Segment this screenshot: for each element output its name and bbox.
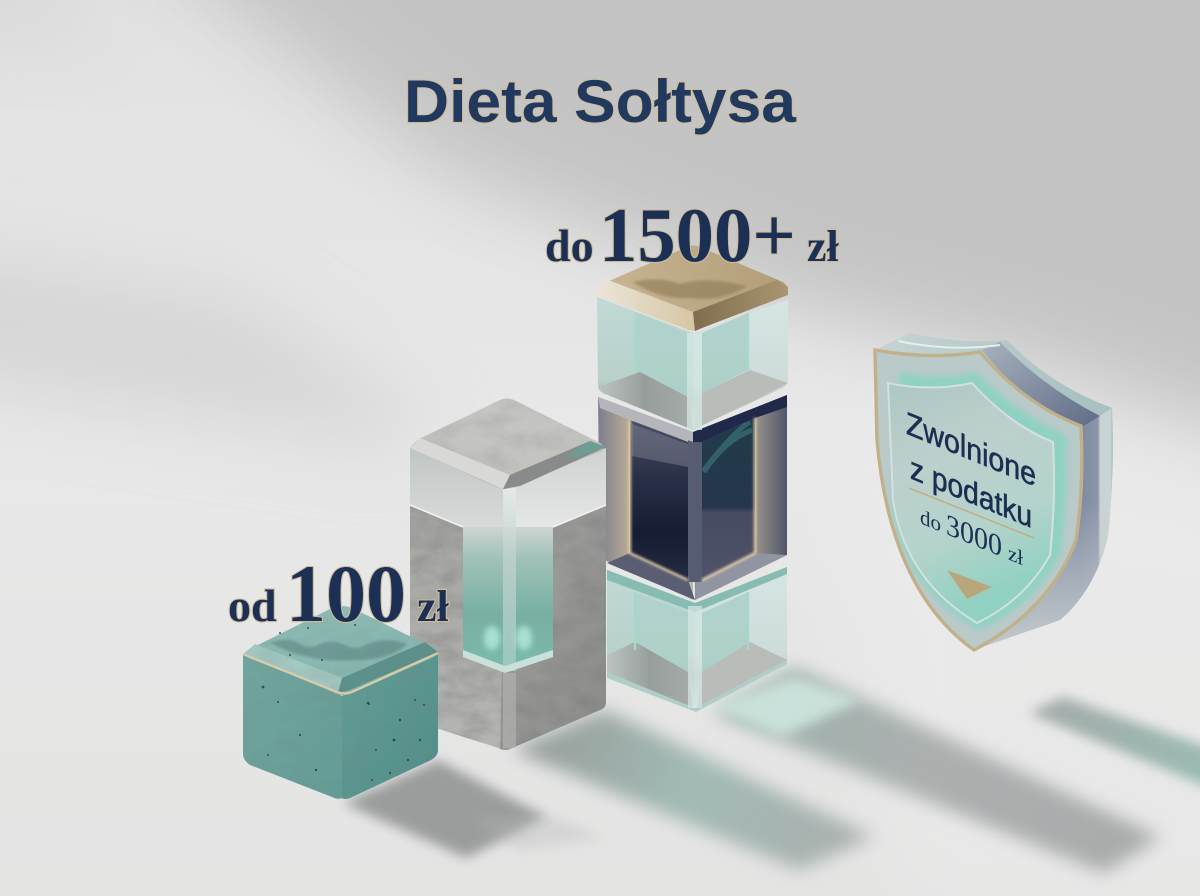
shield front face — [875, 350, 1082, 650]
lower glass block — [607, 567, 787, 712]
shield text: 3000 — [946, 507, 1002, 564]
upper glass block — [597, 297, 788, 430]
ground shadows — [343, 667, 1200, 873]
down-pointing triangle — [947, 570, 992, 599]
concrete pillar with glass window — [400, 395, 610, 755]
bottom chamfers — [607, 553, 695, 600]
speckles — [262, 624, 425, 781]
price label: do 1500+ zł — [545, 192, 840, 278]
top chamfers — [598, 397, 693, 442]
shield text: z podatku — [910, 450, 1032, 536]
shadow: concrete pillar — [512, 710, 874, 870]
shadow: teal block — [343, 760, 547, 858]
stone grain — [258, 641, 342, 696]
leaf shadow on top — [270, 640, 408, 661]
teal stone block — [240, 602, 442, 802]
block left face — [243, 654, 342, 799]
pillar right face — [500, 505, 606, 750]
warm inner glow lines — [630, 418, 755, 580]
frosted glass band — [410, 448, 606, 545]
central bevel — [688, 440, 702, 582]
caustic light from glass — [713, 677, 862, 737]
shield depth side — [973, 408, 1113, 650]
price label: do 1500+ zł: 1500+ — [599, 192, 796, 278]
shield badge — [875, 333, 1113, 650]
shield text: zł — [1008, 541, 1023, 570]
glowing glass window — [410, 488, 606, 673]
pillar top — [410, 398, 604, 489]
gold cap — [597, 246, 788, 331]
inner dark faces — [630, 420, 688, 580]
stone grain — [410, 506, 606, 748]
dark glass block — [598, 395, 787, 600]
teal glow — [892, 372, 1066, 630]
block top — [246, 606, 437, 695]
price label: do 1500+ zł: zł — [807, 222, 840, 271]
block right face — [342, 654, 438, 799]
shadow: glass stack — [713, 667, 1161, 873]
outer side panels — [598, 397, 693, 600]
shadow: shield — [1029, 697, 1200, 790]
divider — [909, 488, 1034, 538]
shield text: do — [920, 505, 941, 537]
background: wall with light and diagonal shadow bands — [0, 0, 1200, 436]
pillar left face — [410, 505, 505, 750]
shield text — [906, 406, 1036, 577]
gold seam — [243, 653, 438, 694]
price label: od 100 zł — [228, 548, 450, 639]
price label: od 100 zł: od — [228, 580, 277, 631]
shield top surface — [875, 333, 1112, 427]
inner plate — [888, 383, 1054, 623]
price label: od 100 zł: 100 — [286, 548, 406, 639]
title: Dieta Sołtysa — [404, 68, 797, 135]
glass stack column (gold cap, glass, dark glass, glass) — [597, 246, 788, 712]
shield text: Zwolnione — [906, 406, 1036, 494]
price label: od 100 zł: zł — [417, 582, 450, 631]
bevels — [243, 644, 342, 693]
price label: do 1500+ zł: do — [545, 220, 594, 271]
